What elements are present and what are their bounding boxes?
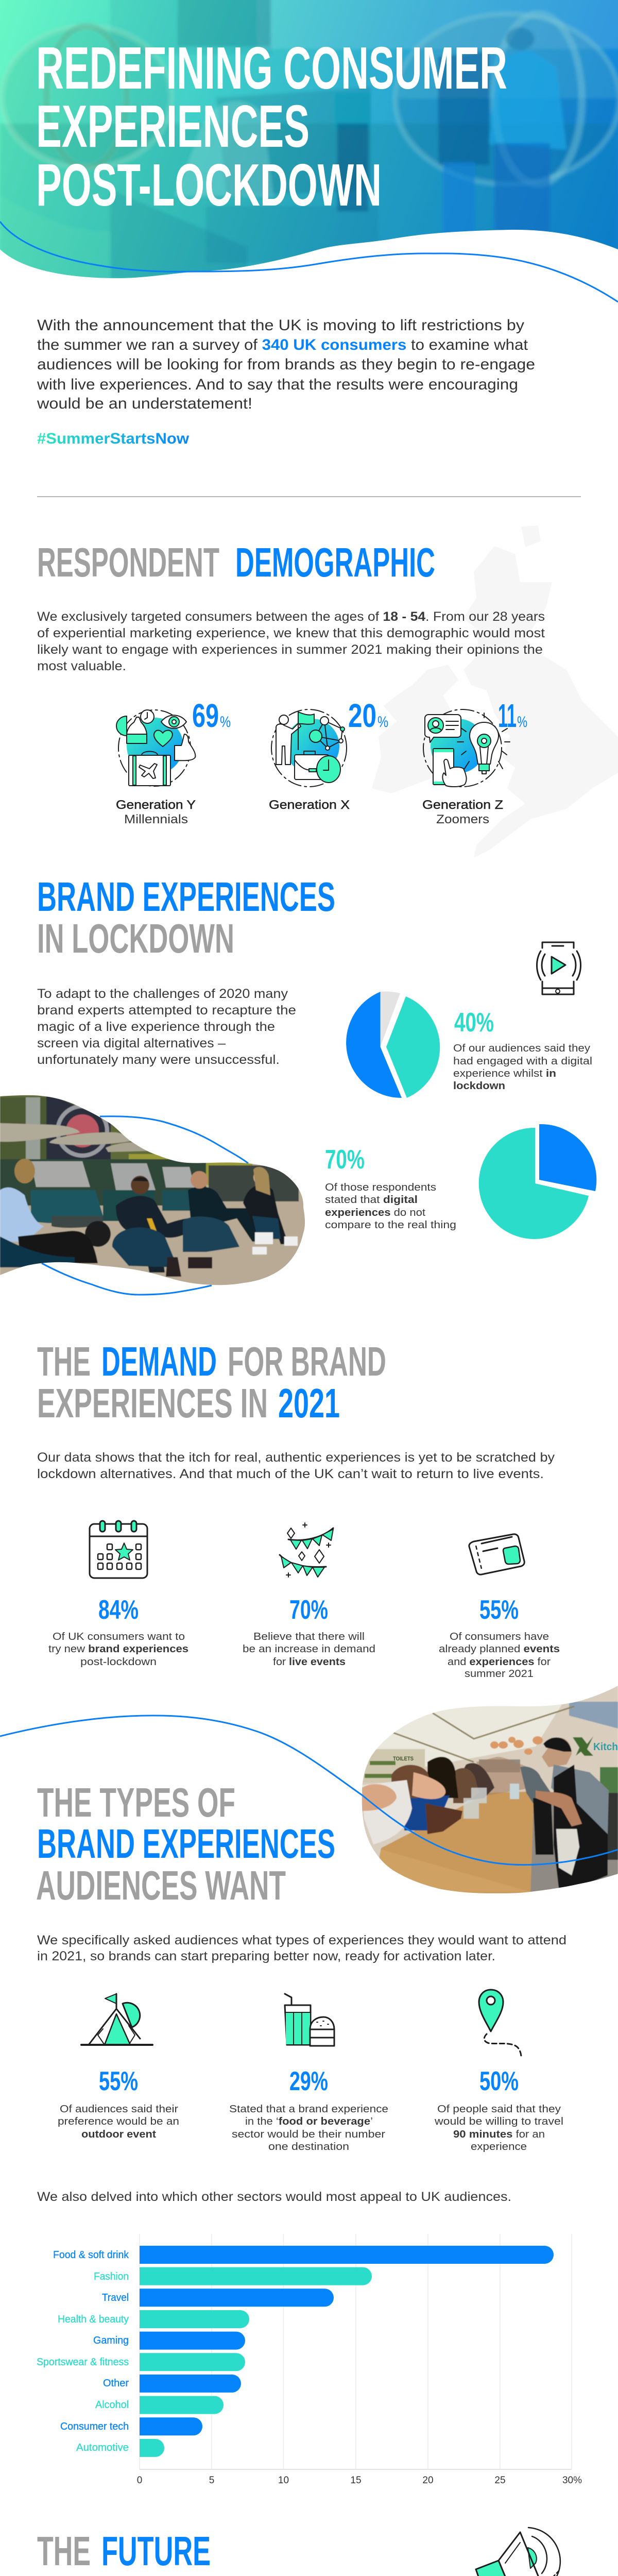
demographic text: most valuable. bbox=[37, 659, 126, 673]
demographic text: We exclusively targeted consumers between the ages of 18 - 54. From our 28 years bbox=[37, 609, 545, 624]
heading: the types of brand experiences audiences want: AUDIENCES WANT bbox=[36, 1862, 286, 1908]
intro text: With the announcement that the UK is moving to lift restrictions by bbox=[37, 317, 524, 334]
stat: 70%: 70% bbox=[289, 1595, 328, 1625]
stat: 40%: lockdown bbox=[453, 1080, 505, 1092]
brand experiences text: magic of a live experience through the bbox=[37, 1020, 275, 1034]
stat: 55%: 55% bbox=[479, 1595, 519, 1625]
pie chart: 40% engaged bbox=[346, 991, 440, 1098]
stat: 70% bbox=[325, 1145, 456, 1231]
axis labels: 25 bbox=[494, 2475, 506, 2486]
stat: 55% outdoor: 55% bbox=[99, 2066, 138, 2096]
icon: megaphone bbox=[476, 2528, 560, 2576]
title: POST-LOCKDOWN bbox=[36, 151, 382, 218]
icon: ticket bbox=[469, 1534, 524, 1574]
stat: 70%: stated that digital bbox=[325, 1194, 418, 1206]
bar: sportswear and fitness: Sportswear & fitness bbox=[37, 2357, 129, 2368]
bar: other: Other bbox=[103, 2378, 129, 2389]
value: 11%: 11 bbox=[498, 697, 517, 734]
bar: automotive: Automotive bbox=[76, 2442, 129, 2453]
stat: 50% bbox=[434, 2066, 563, 2153]
types text: We specifically asked audiences what types of experiences they would want to attend bbox=[37, 1933, 566, 1947]
bar chart: sectors bbox=[37, 2234, 582, 2486]
stat: 84%: try new brand experiences bbox=[48, 1643, 188, 1655]
stat: 40%: experience whilst in bbox=[453, 1068, 556, 1079]
heading: the types of brand experiences audiences want: THE TYPES OF bbox=[37, 1780, 235, 1825]
stat: 70%: experiences do not bbox=[325, 1207, 425, 1218]
stat: 55%: and experiences for bbox=[448, 1656, 551, 1668]
heading: respondent demographic: RESPONDENT bbox=[37, 539, 219, 585]
bar: alcohol: Alcohol bbox=[95, 2399, 129, 2411]
hero wave line bbox=[0, 222, 618, 302]
bar: alcohol bbox=[95, 2396, 224, 2414]
stat: 55% outdoor: outdoor event bbox=[81, 2129, 156, 2140]
stat: 29%: Stated that a brand experience bbox=[229, 2104, 388, 2115]
bar: health and beauty: Health & beauty bbox=[58, 2314, 129, 2325]
map: UK and Ireland bbox=[372, 526, 618, 858]
stat: 40% bbox=[453, 1008, 592, 1092]
bar: sportswear and fitness bbox=[37, 2353, 245, 2371]
label: generation Y: Millennials bbox=[124, 812, 188, 826]
axis labels: 20 bbox=[422, 2475, 434, 2486]
heading: the demand for brand experiences in 2021: EXPERIENCES IN bbox=[37, 1380, 268, 1426]
label: generation Z: Generation Z bbox=[422, 798, 503, 812]
title bbox=[36, 35, 507, 218]
heading: the demand for brand experiences in 2021: THE bbox=[37, 1338, 91, 1384]
stat: 70%: be an increase in demand bbox=[243, 1643, 375, 1655]
bar: food and soft drink bbox=[53, 2246, 554, 2264]
icon: lifestyle bbox=[116, 710, 195, 786]
stat: 50%: would be willing to travel bbox=[434, 2116, 563, 2127]
label: generation Z bbox=[422, 798, 503, 826]
brand experiences text: brand experts attempted to recapture the bbox=[37, 1003, 296, 1018]
label: generation Y: Generation Y bbox=[116, 798, 196, 812]
icon: digital ideas bbox=[423, 709, 510, 787]
bar: health and beauty bbox=[58, 2310, 249, 2328]
stat: 50%: 50% bbox=[479, 2066, 519, 2096]
stat: 29%: 29% bbox=[289, 2066, 328, 2096]
stat: 40%: Of our audiences said they bbox=[453, 1043, 590, 1054]
axis labels: 0 bbox=[137, 2475, 142, 2486]
bar: fashion bbox=[94, 2267, 372, 2285]
bar: gaming bbox=[93, 2332, 245, 2350]
stat: 50%: experience bbox=[471, 2141, 527, 2153]
title: EXPERIENCES bbox=[36, 93, 310, 160]
intro text: with live experiences. And to say that the results were encouraging bbox=[37, 376, 518, 393]
icon: bunting bbox=[280, 1523, 333, 1577]
axis labels: 5 bbox=[209, 2475, 214, 2486]
photo: street food bar bbox=[360, 1685, 618, 1896]
icon: map pin bbox=[479, 1990, 521, 2058]
stat: generation X bbox=[269, 697, 388, 812]
photo: panel discussion on beanbags bbox=[0, 1092, 309, 1295]
stat: 50%: Of people said that they bbox=[437, 2104, 561, 2115]
curved line across food photo bbox=[0, 1716, 618, 1865]
icon: calendar bbox=[90, 1521, 147, 1578]
stat: 29%: sector would be their number bbox=[232, 2129, 385, 2140]
stat: 55%: summer 2021 bbox=[465, 1668, 534, 1680]
stat: 55% outdoor: Of audiences said their bbox=[60, 2104, 178, 2115]
stat: 70% bbox=[243, 1595, 375, 1668]
label: generation Y bbox=[116, 798, 196, 826]
brand experiences text bbox=[37, 987, 296, 1067]
stat: generation Z bbox=[422, 697, 527, 826]
stat: 70%: for live events bbox=[273, 1656, 346, 1668]
heading: the demand for brand experiences in 2021 bbox=[37, 1338, 386, 1426]
stat: 29%: one destination bbox=[268, 2141, 349, 2153]
heading: the demand for brand experiences in 2021: 2021 bbox=[278, 1380, 340, 1426]
heading: brand experiences in lockdown: IN LOCKDOWN bbox=[37, 916, 234, 961]
types text: in 2021, so brands can start preparing better now, ready for activation later. bbox=[37, 1949, 495, 1963]
stat: 84%: 84% bbox=[98, 1595, 139, 1625]
icon: phone video bbox=[537, 942, 581, 994]
bar: fashion: Fashion bbox=[94, 2271, 129, 2282]
axis labels: 15 bbox=[350, 2475, 362, 2486]
stat: 70%: compare to the real thing bbox=[325, 1219, 456, 1231]
value: 20%: 20 bbox=[348, 697, 376, 734]
bar: travel bbox=[102, 2289, 334, 2307]
stat: 84%: Of UK consumers want to bbox=[53, 1631, 185, 1642]
bar: travel: Travel bbox=[102, 2292, 129, 2303]
intro text bbox=[37, 317, 535, 412]
bar: automotive bbox=[76, 2439, 164, 2457]
icon: tent bbox=[81, 1994, 152, 2045]
stat: 55%: Of consumers have bbox=[450, 1631, 549, 1642]
demographic text: of experiential marketing experience, we knew that this demographic would most bbox=[37, 626, 545, 640]
axis labels bbox=[137, 2475, 582, 2486]
stat: 40%: 40% bbox=[454, 1008, 494, 1038]
heading: brand experiences in lockdown: BRAND EXPERIENCES bbox=[37, 874, 335, 920]
photo: street food bar: TOILETS bbox=[393, 1756, 414, 1762]
demand text: lockdown alternatives. And that much of the UK can’t wait to return to live events. bbox=[37, 1467, 544, 1481]
bar: food and soft drink: Food & soft drink bbox=[53, 2249, 129, 2261]
bar: consumer tech: Consumer tech bbox=[60, 2421, 129, 2432]
heading: the future: THE bbox=[37, 2528, 91, 2574]
intro text: the summer we ran a survey of 340 UK consumers to examine what bbox=[37, 336, 528, 353]
intro text: would be an understatement! bbox=[37, 395, 252, 412]
heading: the types of brand experiences audiences want: BRAND EXPERIENCES bbox=[37, 1821, 335, 1867]
stat: 84% bbox=[48, 1595, 188, 1668]
stat: 70%: Believe that there will bbox=[253, 1631, 365, 1642]
stat: generation Y bbox=[116, 697, 231, 826]
hero banner with photo bbox=[0, 0, 618, 289]
stat: 55%: already planned events bbox=[439, 1643, 560, 1655]
intro text: audiences will be looking for from brands as they begin to re-engage bbox=[37, 356, 535, 373]
heading: the types of brand experiences audiences want bbox=[36, 1780, 335, 1908]
stat: 55% bbox=[439, 1595, 560, 1680]
sectors intro text: We also delved into which other sectors would most appeal to UK audiences. bbox=[37, 2190, 511, 2204]
axis labels: 10 bbox=[278, 2475, 289, 2486]
stat: 84%: post-lockdown bbox=[80, 1656, 157, 1668]
label: generation Z: Zoomers bbox=[436, 812, 489, 826]
value: 69%: 69 bbox=[192, 697, 219, 734]
brand experiences text: To adapt to the challenges of 2020 many bbox=[37, 987, 288, 1001]
stat: 29%: in the ‘ food or beverage ’ bbox=[245, 2116, 373, 2127]
demand text: Our data shows that the itch for real, authentic experiences is yet to be scratched by bbox=[37, 1450, 555, 1465]
value: 69%: % bbox=[220, 714, 231, 731]
value: 20%: % bbox=[377, 714, 388, 731]
stat: 55% outdoor bbox=[58, 2066, 179, 2140]
demographic text: likely want to engage with experiences in summer 2021 making their opinions the bbox=[37, 642, 543, 657]
heading: the demand for brand experiences in 2021: DEMAND bbox=[101, 1338, 217, 1384]
brand experiences text: unfortunately many were unsuccessful. bbox=[37, 1053, 280, 1067]
stat: 40%: had engaged with a digital bbox=[453, 1056, 592, 1067]
axis labels: 30% bbox=[562, 2475, 582, 2486]
stat: 55% outdoor: preference would be an bbox=[58, 2116, 179, 2127]
brand experiences text: screen via digital alternatives – bbox=[37, 1036, 226, 1050]
label: generation X: Generation X bbox=[269, 798, 350, 812]
stat: 70%: 70% bbox=[325, 1145, 365, 1175]
stat: 50%: 90 minutes for an bbox=[453, 2129, 545, 2140]
stat: 29% bbox=[229, 2066, 388, 2153]
icon: business network bbox=[271, 709, 347, 787]
heading: the future bbox=[37, 2528, 211, 2574]
demographic text bbox=[37, 609, 545, 673]
value: 11%: % bbox=[517, 714, 527, 731]
bar: gaming: Gaming bbox=[93, 2335, 129, 2346]
pie chart: 70% bbox=[479, 1124, 596, 1239]
icon: drink and burger bbox=[285, 1994, 334, 2046]
stat: 70%: Of those respondents bbox=[325, 1182, 436, 1193]
heading: brand experiences in lockdown bbox=[37, 874, 335, 961]
hashtag: #SummerStartsNow bbox=[37, 430, 190, 447]
heading: the demand for brand experiences in 2021: FOR BRAND bbox=[228, 1338, 386, 1384]
heading: the future: FUTURE bbox=[101, 2528, 211, 2574]
demand text bbox=[37, 1450, 555, 1481]
bar: other bbox=[103, 2375, 241, 2393]
heading: respondent demographic: DEMOGRAPHIC bbox=[235, 539, 435, 585]
types text bbox=[37, 1933, 566, 1963]
bar: consumer tech bbox=[60, 2417, 202, 2435]
